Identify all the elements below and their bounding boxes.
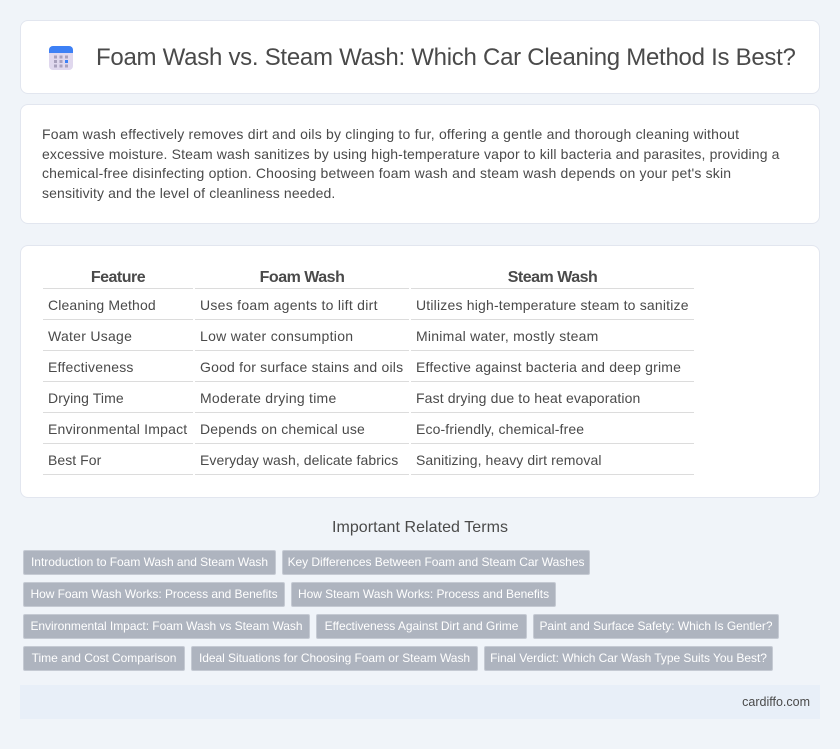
row: effectiveness [48, 359, 681, 375]
chip: Ideal Situations for Choosing Foam or Steam Wash [199, 651, 470, 665]
row: best for: Everyday wash, delicate fabrics [200, 452, 398, 468]
chip: Time and Cost Comparison [32, 651, 176, 665]
row: cleaning method: Cleaning Method [48, 297, 156, 313]
chip [291, 582, 556, 607]
chip: Introduction to Foam Wash and Steam Wash [31, 555, 268, 569]
chip [191, 646, 478, 671]
related terms heading: Important Related Terms [332, 519, 508, 536]
chip [23, 550, 276, 575]
chip: How Steam Wash Works: Process and Benefits [298, 587, 549, 601]
table header: Steam Wash [508, 269, 597, 286]
chip: Effectiveness Against Dirt and Grime [325, 619, 518, 633]
row: water usage: Water Usage [48, 328, 132, 344]
intro paragraph [42, 126, 780, 201]
row: water usage: Minimal water, mostly steam [416, 328, 599, 344]
title: Foam Wash vs. Steam Wash: Which Car Cleaning Method Is Best? [96, 44, 796, 71]
row: best for [48, 452, 602, 468]
icon: calendar [49, 46, 73, 70]
row: cleaning method: Utilizes high-temperature steam to sanitize [416, 297, 689, 313]
chip [23, 646, 185, 671]
chip: Environmental Impact: Foam Wash vs Steam Wash [30, 619, 303, 633]
chip [316, 614, 527, 639]
chip [282, 550, 590, 575]
chip [23, 582, 285, 607]
intro paragraph: chemical-free disinfecting option. Choosing between foam wash and steam wash depends on your pet's skin [42, 165, 731, 181]
chip: Paint and Surface Safety: Which Is Gentler? [539, 619, 773, 633]
chip [484, 646, 773, 671]
row: best for: Sanitizing, heavy dirt removal [416, 452, 602, 468]
footer bar [20, 685, 820, 719]
intro paragraph: sensitivity and the level of cleanliness needed. [42, 184, 335, 200]
row: cleaning method: Uses foam agents to lift dirt [200, 297, 378, 313]
row: environmental impact: Depends on chemical use [200, 421, 365, 437]
row: drying time [48, 390, 640, 406]
footer brand: cardiffo.com [742, 695, 810, 709]
table header [91, 269, 597, 286]
row: cleaning method [48, 297, 689, 313]
row: effectiveness: Effective against bacteria and deep grime [416, 359, 681, 375]
chip: How Foam Wash Works: Process and Benefits [30, 587, 278, 601]
row: water usage: Low water consumption [200, 328, 353, 344]
row: drying time: Moderate drying time [200, 390, 337, 406]
intro paragraph: Foam wash effectively removes dirt and oils by clinging to fur, offering a gentle and thorough cleaning without [42, 126, 739, 142]
table [43, 269, 694, 475]
related terms chips [23, 550, 779, 671]
chip [23, 614, 310, 639]
header panel [20, 20, 820, 94]
row: drying time: Fast drying due to heat evaporation [416, 390, 640, 406]
row: effectiveness: Good for surface stains and oils [200, 359, 403, 375]
row: environmental impact: Eco-friendly, chemical-free [416, 421, 584, 437]
row: drying time: Drying Time [48, 390, 124, 406]
comparison table panel [20, 245, 820, 498]
intro paragraph: excessive moisture. Steam wash sanitizes by using high-temperature vapor to kill bacteria and parasites, providing a [42, 146, 780, 162]
row: best for: Best For [48, 452, 101, 468]
table header: Foam Wash [260, 269, 344, 286]
row: effectiveness: Effectiveness [48, 359, 134, 375]
row: environmental impact [48, 421, 584, 437]
chip: Final Verdict: Which Car Wash Type Suits You Best? [490, 651, 767, 665]
chip: Key Differences Between Foam and Steam Car Washes [288, 555, 584, 569]
row: water usage [48, 328, 599, 344]
row: environmental impact: Environmental Impact [48, 421, 187, 437]
intro text panel [20, 104, 820, 224]
chip [533, 614, 779, 639]
table header: Feature [91, 269, 145, 286]
